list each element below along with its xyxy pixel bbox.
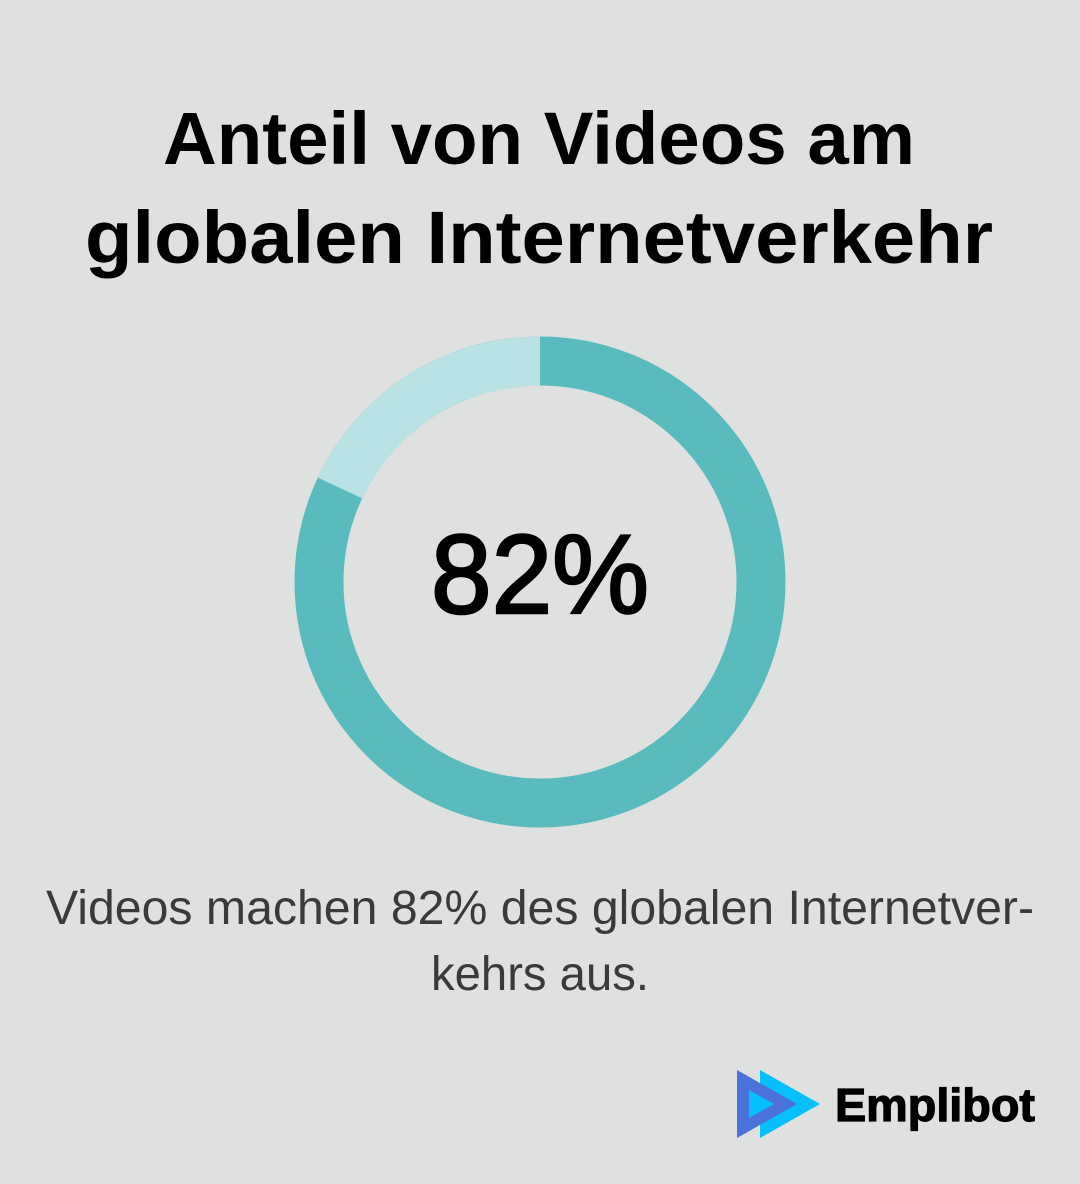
description text <box>46 882 1034 1001</box>
icon: play triangles <box>737 1070 820 1138</box>
description text: Videos machen 82% des globalen Internetver- <box>46 882 1034 935</box>
title: globalen Internetverkehr <box>85 196 993 279</box>
logo: Emplibot <box>737 1070 1035 1138</box>
donut chart: 82% <box>319 361 761 803</box>
central value: 82% <box>431 512 649 637</box>
title: Anteil von Videos am <box>163 97 915 180</box>
description text: kehrs aus. <box>431 948 649 1001</box>
wordmark: Emplibot <box>835 1079 1035 1131</box>
title <box>85 97 993 279</box>
